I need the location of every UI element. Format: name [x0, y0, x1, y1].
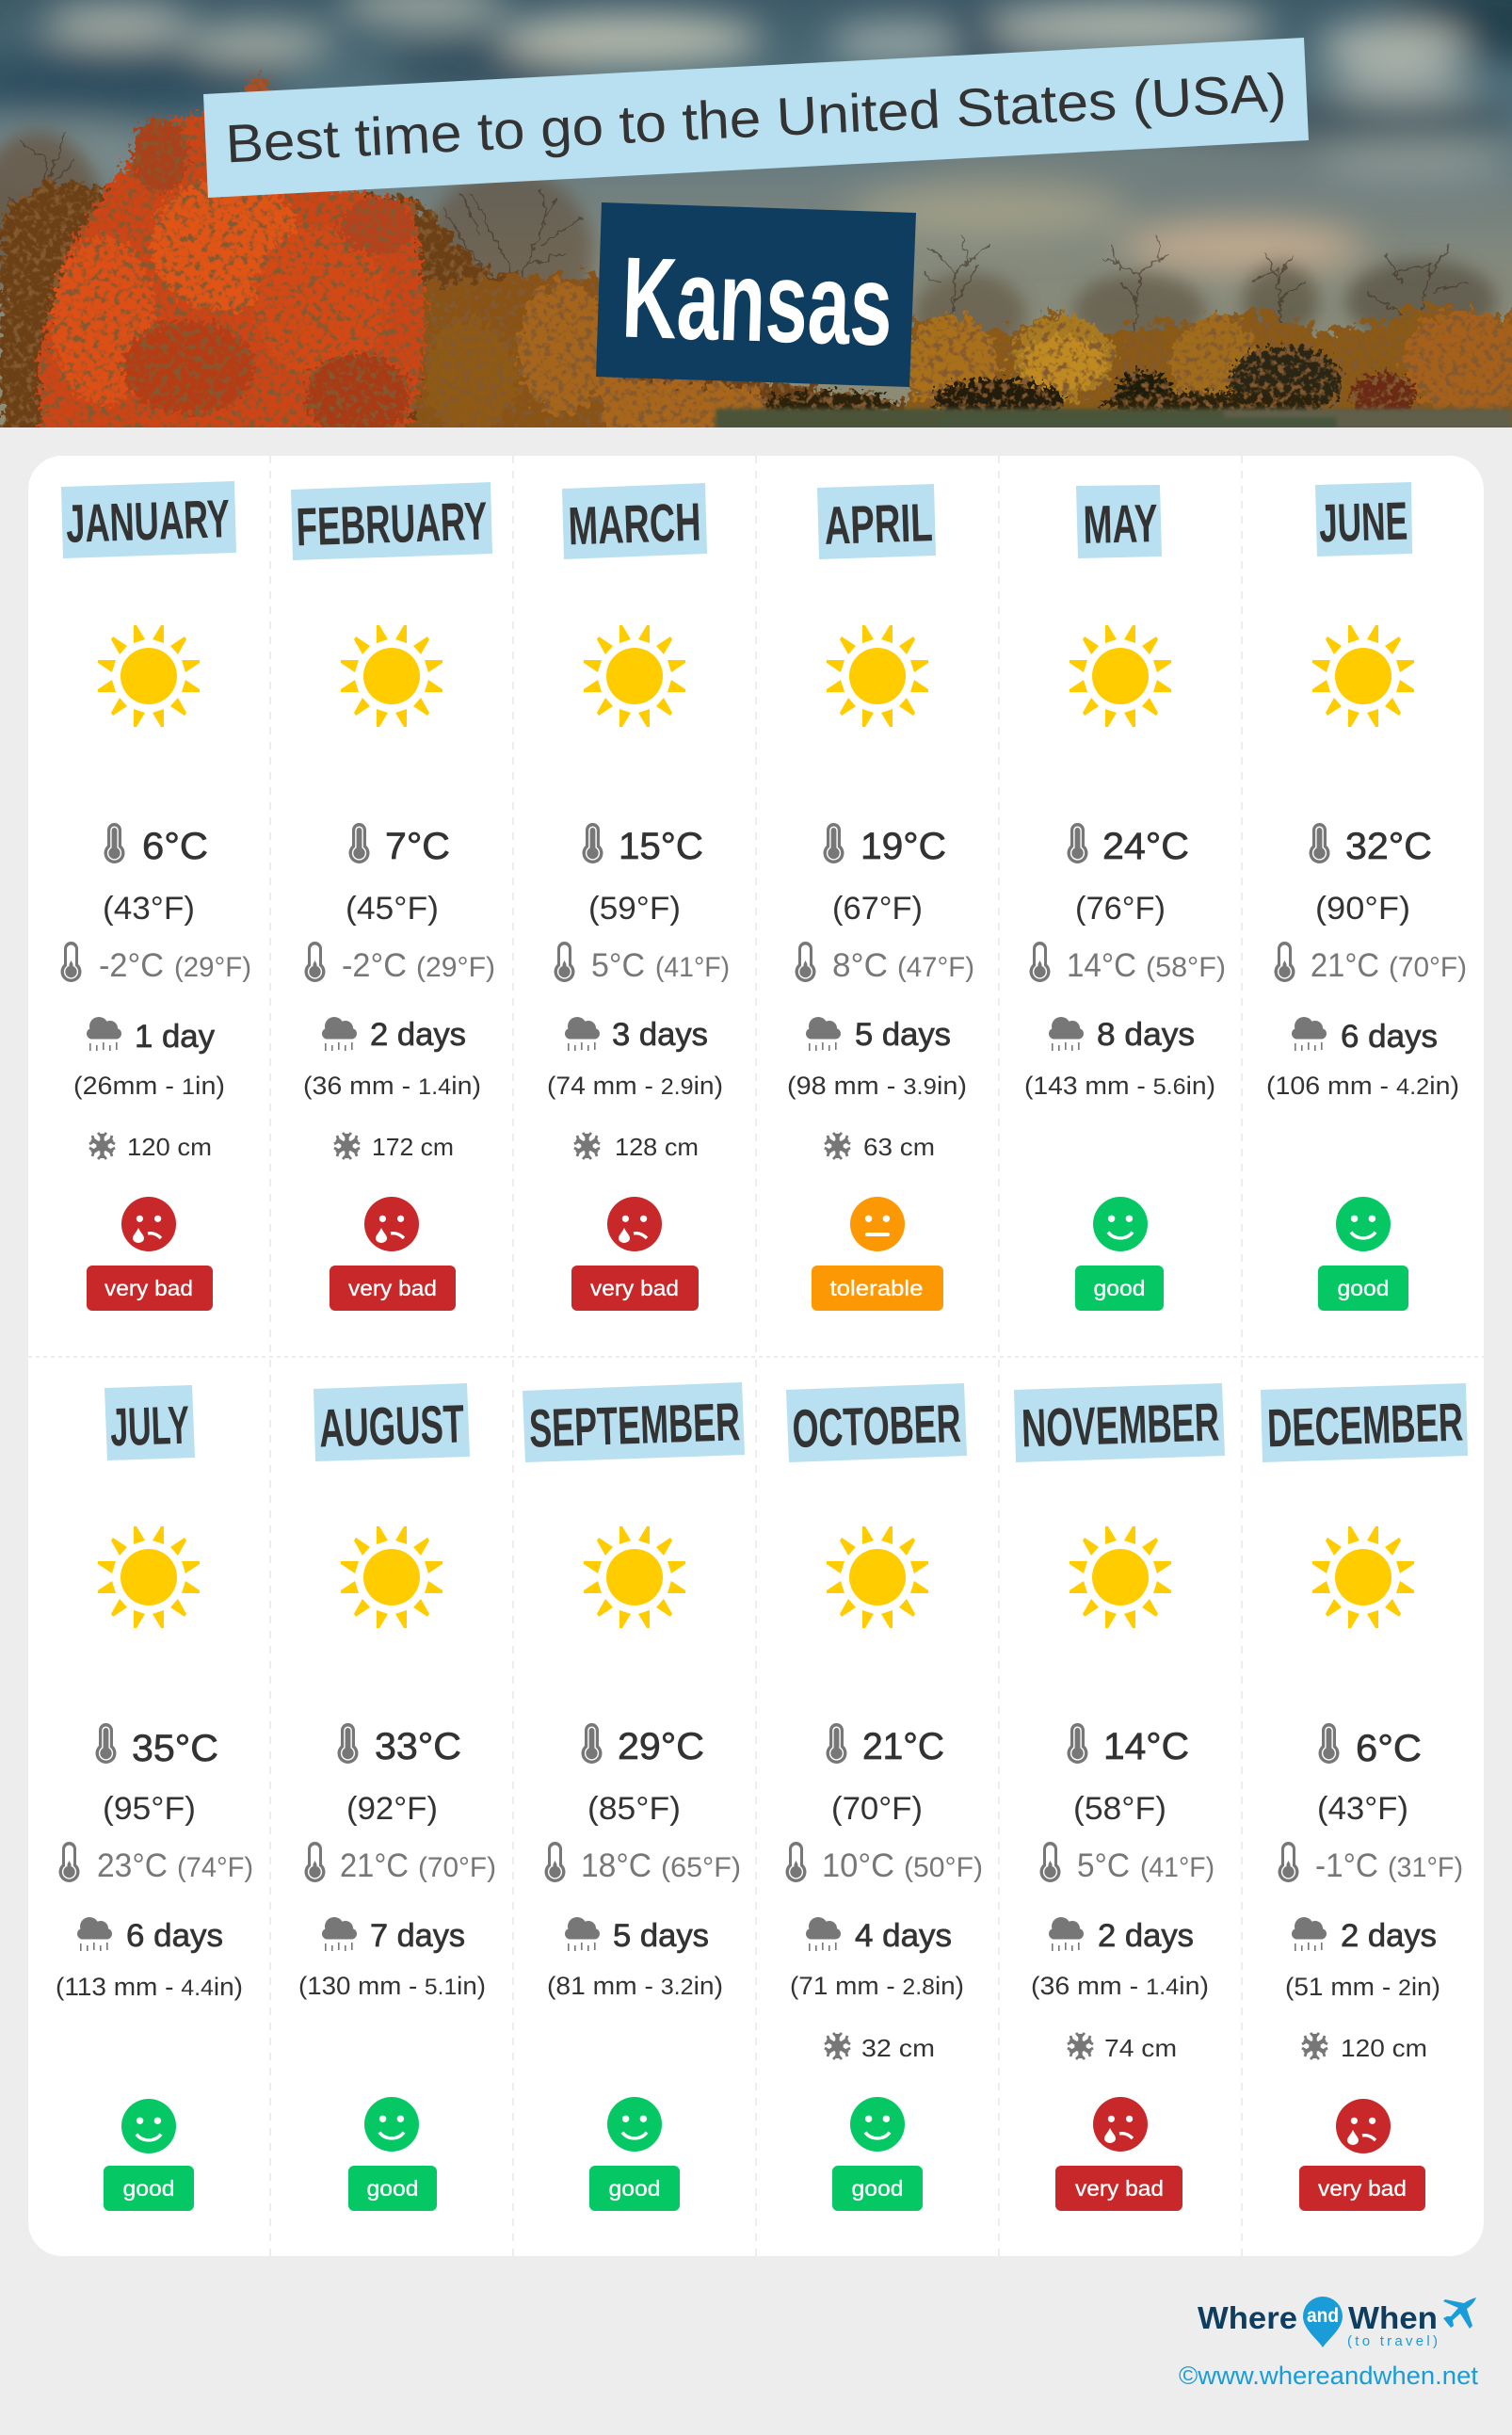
icon: sun: [1070, 625, 1171, 727]
low temperature: (41°F): [655, 952, 730, 983]
rating badge: [832, 2166, 923, 2211]
logo: Where and When (to travel): [1198, 2297, 1476, 2349]
low temperature: [1275, 942, 1467, 984]
rating badge: [1299, 2166, 1425, 2211]
high temperature: 24°C: [1102, 826, 1189, 867]
rating badge: [348, 2166, 437, 2211]
icon: good face: [121, 2099, 176, 2153]
header photo: autumn trees under a cloudy sky: [0, 0, 1512, 452]
high temperature: 7°C: [385, 826, 450, 867]
rating badge: good: [851, 2176, 904, 2201]
rating badge: very bad: [590, 1276, 679, 1300]
high temperature: 32°C: [1345, 826, 1432, 867]
month heading: MAY: [1083, 493, 1158, 556]
high temperature Fahrenheit: (90°F): [1315, 891, 1410, 927]
rain days: 6 days: [126, 1918, 223, 1954]
rain days: [1049, 1017, 1195, 1053]
rainfall: (106 mm - 4.2in): [1266, 1072, 1459, 1100]
low temperature: (29°F): [174, 952, 251, 983]
low temperature: (70°F): [1389, 952, 1467, 983]
high temperature: [1318, 1723, 1422, 1769]
snow: [89, 1133, 212, 1161]
icon: sun: [584, 625, 685, 727]
icon: good face: [850, 2097, 905, 2152]
icon: very bad face: [1336, 2099, 1391, 2153]
high temperature: 21°C: [862, 1726, 944, 1767]
low temperature: [544, 1842, 741, 1884]
rating badge: [1055, 2166, 1182, 2211]
rain days: [1049, 1917, 1194, 1954]
icon: tolerable face: [850, 1197, 905, 1251]
high temperature: [1068, 1723, 1189, 1767]
low temperature: (41°F): [1140, 1852, 1214, 1883]
rainfall: (26mm - 1in): [73, 1072, 225, 1100]
month heading: [61, 481, 236, 558]
snow: 32 cm: [861, 2034, 935, 2062]
icon: good face: [364, 2097, 419, 2152]
title banner: Best time to go to the United States (USA): [224, 63, 1288, 175]
high temperature: [582, 823, 703, 867]
logo: Where and When (to travel): When: [1348, 2300, 1438, 2335]
low temperature: -2°C: [99, 947, 164, 984]
logo: Where and When (to travel): Where: [1198, 2300, 1297, 2335]
icon: good face: [607, 2097, 662, 2152]
rating badge: very bad: [1075, 2176, 1164, 2201]
rating badge: [87, 1266, 213, 1311]
low temperature: (47°F): [897, 952, 974, 983]
panel: December: [1261, 1383, 1468, 2211]
low temperature: [785, 1842, 983, 1884]
low temperature: 14°C: [1067, 947, 1136, 984]
low temperature: [60, 942, 251, 984]
high temperature: 15°C: [619, 826, 703, 867]
snow: 120 cm: [1341, 2034, 1427, 2062]
low temperature: (65°F): [661, 1852, 741, 1883]
rain days: [806, 1017, 951, 1053]
month heading: [314, 1383, 470, 1461]
high temperature: [827, 1723, 944, 1767]
icon: sun: [827, 1526, 928, 1628]
low temperature: [554, 942, 730, 984]
panel: June: [1266, 482, 1467, 1311]
rainfall: (36 mm - 1.4in): [303, 1072, 481, 1100]
rain days: [1292, 1917, 1437, 1954]
rating badge: good: [367, 2176, 418, 2201]
rating badge: [589, 2166, 680, 2211]
month heading: SEPTEMBER: [528, 1392, 741, 1459]
high temperature: [823, 823, 946, 867]
high temperature: [337, 1723, 461, 1767]
rating badge: very bad: [348, 1276, 437, 1300]
rainfall: (36 mm - 1.4in): [1031, 1972, 1209, 2000]
rating badge: good: [1094, 1276, 1145, 1300]
low temperature: 10°C: [822, 1847, 894, 1884]
rain days: 2 days: [1341, 1918, 1437, 1954]
snow: [334, 1133, 454, 1161]
low temperature: (50°F): [904, 1852, 983, 1883]
low temperature: (70°F): [418, 1852, 496, 1883]
rain days: 2 days: [1098, 1918, 1194, 1954]
low temperature: [1279, 1842, 1463, 1884]
low temperature: 21°C: [340, 1847, 409, 1884]
month heading: NOVEMBER: [1021, 1393, 1220, 1459]
high temperature Fahrenheit: (76°F): [1075, 891, 1166, 927]
rain days: 8 days: [1097, 1017, 1195, 1053]
logo: Where and When (to travel): (to travel): [1347, 2333, 1438, 2349]
rainfall: (81 mm - 3.2in): [547, 1972, 723, 2000]
icon: sun: [1312, 625, 1414, 727]
high temperature Fahrenheit: (85°F): [587, 1791, 681, 1827]
panel: October: [785, 1383, 983, 2211]
low temperature: 18°C: [581, 1847, 651, 1884]
low temperature: 21°C: [1311, 947, 1379, 984]
panel: August: [298, 1383, 496, 2211]
rain days: [806, 1917, 952, 1954]
rating badge: very bad: [105, 1276, 193, 1300]
state name: Kansas: Kansas: [620, 234, 894, 369]
icon: very bad face: [364, 1197, 419, 1251]
month heading: APRIL: [824, 492, 934, 556]
icon: sun: [98, 1526, 200, 1628]
high temperature: 35°C: [132, 1728, 218, 1769]
rainfall: (130 mm - 5.1in): [298, 1972, 486, 2000]
high temperature Fahrenheit: (95°F): [103, 1791, 196, 1827]
rain days: 3 days: [612, 1017, 708, 1053]
low temperature: (31°F): [1388, 1852, 1463, 1883]
snow: 74 cm: [1104, 2034, 1177, 2062]
high temperature Fahrenheit: (92°F): [346, 1791, 438, 1827]
month heading: JUNE: [1318, 492, 1408, 554]
high temperature: [1309, 823, 1432, 867]
icon: good face: [1336, 1197, 1391, 1251]
icon: very bad face: [607, 1197, 662, 1251]
high temperature: 19°C: [861, 826, 946, 867]
high temperature Fahrenheit: (43°F): [103, 891, 195, 927]
rainfall: (74 mm - 2.9in): [547, 1072, 723, 1100]
rating badge: [1075, 1266, 1164, 1311]
high temperature: 14°C: [1103, 1726, 1189, 1767]
snow: 172 cm: [372, 1133, 454, 1161]
rating badge: [571, 1266, 699, 1311]
month heading: [817, 484, 936, 559]
snow: [574, 1133, 699, 1161]
low temperature: 5°C: [591, 947, 645, 984]
snow: 63 cm: [863, 1133, 935, 1161]
icon: sun: [341, 1526, 442, 1628]
month heading: JANUARY: [65, 489, 231, 555]
rain days: 6 days: [1341, 1019, 1438, 1055]
month heading: FEBRUARY: [296, 492, 489, 557]
icon: airplane: [1443, 2298, 1476, 2329]
high temperature Fahrenheit: (58°F): [1073, 1791, 1166, 1827]
low temperature: -2°C: [342, 947, 407, 984]
high temperature: 6°C: [1356, 1728, 1422, 1769]
rating badge: good: [608, 2176, 661, 2201]
month heading: [1014, 1383, 1225, 1462]
high temperature: [1068, 823, 1189, 867]
low temperature: [58, 1842, 253, 1884]
rainfall: (143 mm - 5.6in): [1024, 1072, 1215, 1100]
panel: May: [1024, 485, 1226, 1311]
panel: February: [291, 482, 495, 1311]
panel: April: [787, 484, 974, 1311]
rating badge: [812, 1266, 943, 1311]
rain days: [1292, 1017, 1438, 1055]
month heading: [1315, 482, 1412, 556]
month heading: [105, 1385, 195, 1460]
rain days: [565, 1017, 708, 1053]
rain days: [87, 1017, 215, 1055]
low temperature: 5°C: [1077, 1847, 1130, 1884]
low temperature: [305, 942, 495, 984]
high temperature Fahrenheit: (70°F): [831, 1791, 923, 1827]
snow: [1302, 2033, 1427, 2062]
rating badge: [1318, 1266, 1408, 1311]
high temperature: 6°C: [142, 826, 208, 867]
rainfall: (98 mm - 3.9in): [787, 1072, 967, 1100]
rain days: [565, 1917, 709, 1954]
icon: map pin: [1303, 2297, 1343, 2347]
rainfall: (71 mm - 2.8in): [790, 1972, 964, 2000]
high temperature: 29°C: [618, 1726, 704, 1767]
rainfall: (51 mm - 2in): [1285, 1973, 1440, 2001]
panel: July: [56, 1385, 253, 2211]
state name: Kansas: [596, 202, 916, 387]
panel: monthly weather grid: [28, 456, 1484, 2256]
snow: [825, 2033, 935, 2062]
rain days: [322, 1917, 465, 1954]
high temperature: [348, 823, 450, 867]
copyright link: ©www.whereandwhen.net: [1179, 2362, 1478, 2390]
panel: November: [1014, 1383, 1225, 2211]
logo: Where and When (to travel): and: [1307, 2305, 1339, 2327]
month heading: [562, 483, 707, 559]
rain days: 4 days: [855, 1918, 952, 1954]
snow: 128 cm: [615, 1133, 699, 1161]
icon: sun: [584, 1526, 685, 1628]
icon: sun: [98, 625, 200, 727]
icon: sun: [341, 625, 442, 727]
snow: [825, 1133, 935, 1161]
rain days: 7 days: [370, 1918, 465, 1954]
rating badge: good: [1337, 1276, 1390, 1300]
low temperature: 8°C: [832, 947, 888, 984]
rain days: 1 day: [135, 1019, 215, 1055]
low temperature: (74°F): [177, 1852, 253, 1883]
low temperature: [1030, 942, 1226, 984]
month heading: JULY: [109, 1395, 190, 1458]
rain days: 2 days: [370, 1017, 466, 1053]
high temperature: [96, 1723, 218, 1769]
rating badge: [104, 2166, 194, 2211]
icon: sun: [1312, 1526, 1414, 1628]
high temperature: 33°C: [375, 1726, 461, 1767]
icon: sun: [827, 625, 928, 727]
month heading: OCTOBER: [792, 1394, 962, 1459]
high temperature Fahrenheit: (43°F): [1317, 1791, 1408, 1827]
low temperature: [795, 942, 974, 984]
rain days: [322, 1017, 466, 1053]
month heading: MARCH: [568, 492, 702, 556]
low temperature: (29°F): [416, 952, 495, 983]
rating badge: good: [122, 2176, 175, 2201]
high temperature: [104, 823, 208, 867]
rain days: [77, 1917, 223, 1954]
rating badge: [330, 1266, 456, 1311]
rain days: 5 days: [613, 1918, 709, 1954]
rain days: 5 days: [855, 1017, 951, 1053]
month heading: [786, 1383, 967, 1462]
icon: very bad face: [121, 1197, 176, 1251]
low temperature: 23°C: [97, 1847, 168, 1884]
high temperature: [582, 1723, 704, 1767]
icon: good face: [1093, 1197, 1148, 1251]
month heading: [291, 482, 492, 560]
low temperature: [1039, 1842, 1214, 1884]
low temperature: -1°C: [1315, 1847, 1378, 1884]
high temperature Fahrenheit: (59°F): [588, 891, 681, 927]
low temperature: [305, 1842, 496, 1884]
panel: September: [523, 1382, 745, 2211]
snow: 120 cm: [127, 1133, 212, 1161]
icon: very bad face: [1093, 2097, 1148, 2152]
rainfall: (113 mm - 4.4in): [56, 1973, 243, 2001]
panel: January: [60, 481, 251, 1311]
title banner: [203, 38, 1309, 198]
high temperature Fahrenheit: (67°F): [832, 891, 923, 927]
panel: March: [547, 483, 730, 1311]
low temperature: (58°F): [1146, 952, 1226, 983]
month heading: AUGUST: [318, 1394, 465, 1459]
high temperature Fahrenheit: (45°F): [346, 891, 439, 927]
rating badge: tolerable: [830, 1276, 923, 1300]
rating badge: very bad: [1318, 2176, 1407, 2201]
snow: [1068, 2033, 1177, 2062]
month heading: [523, 1382, 745, 1462]
month heading: [1076, 485, 1162, 558]
icon: sun: [1070, 1526, 1171, 1628]
